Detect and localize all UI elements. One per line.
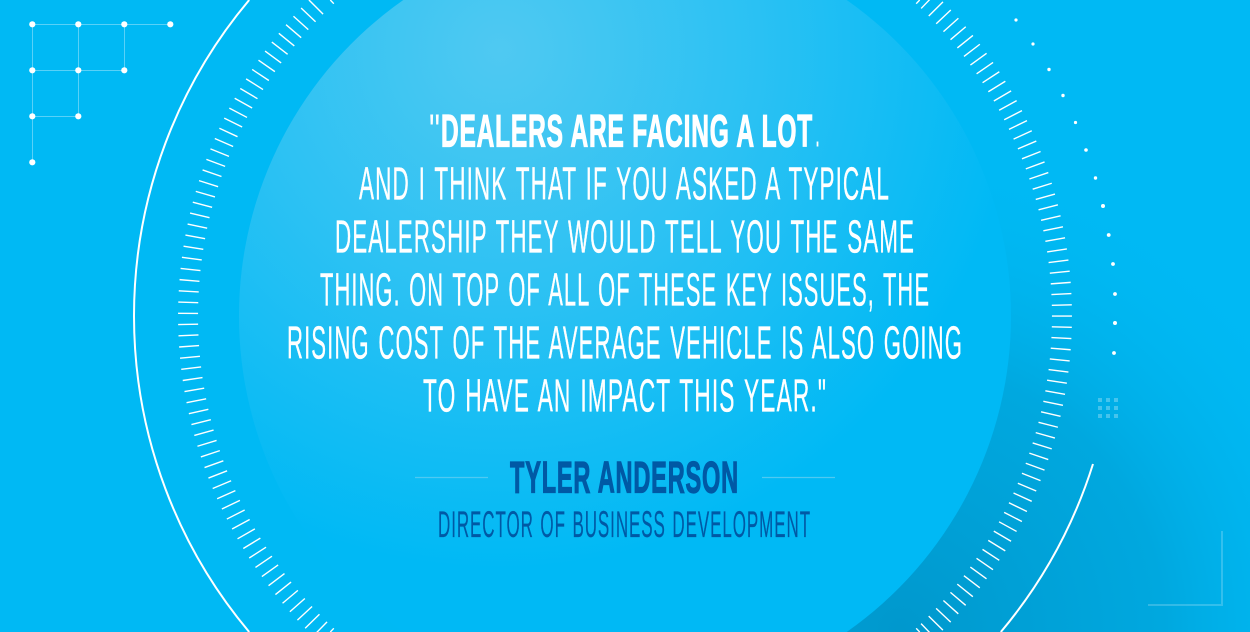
inner circle bbox=[239, 0, 1011, 632]
node grid top left bbox=[29, 21, 173, 165]
background shading lower right bbox=[420, 150, 1250, 632]
quote text bbox=[287, 104, 963, 422]
quote text: . bbox=[815, 104, 820, 156]
quote text: DEALERS ARE FACING A LOT bbox=[441, 106, 813, 156]
quote text: TO HAVE AN IMPACT THIS YEAR." bbox=[423, 370, 827, 422]
attribution dividers bbox=[415, 476, 835, 478]
small square grid bbox=[1098, 398, 1118, 418]
outer arc bbox=[134, 0, 1093, 632]
text: DIRECTOR OF BUSINESS DEVELOPMENT bbox=[438, 504, 811, 545]
corner bracket bbox=[1148, 531, 1222, 605]
quote text: " bbox=[429, 104, 440, 156]
dotted arc top right bbox=[1014, 18, 1117, 355]
attribution name: TYLER ANDERSON bbox=[510, 454, 739, 502]
tick ring bbox=[188, 0, 1062, 632]
